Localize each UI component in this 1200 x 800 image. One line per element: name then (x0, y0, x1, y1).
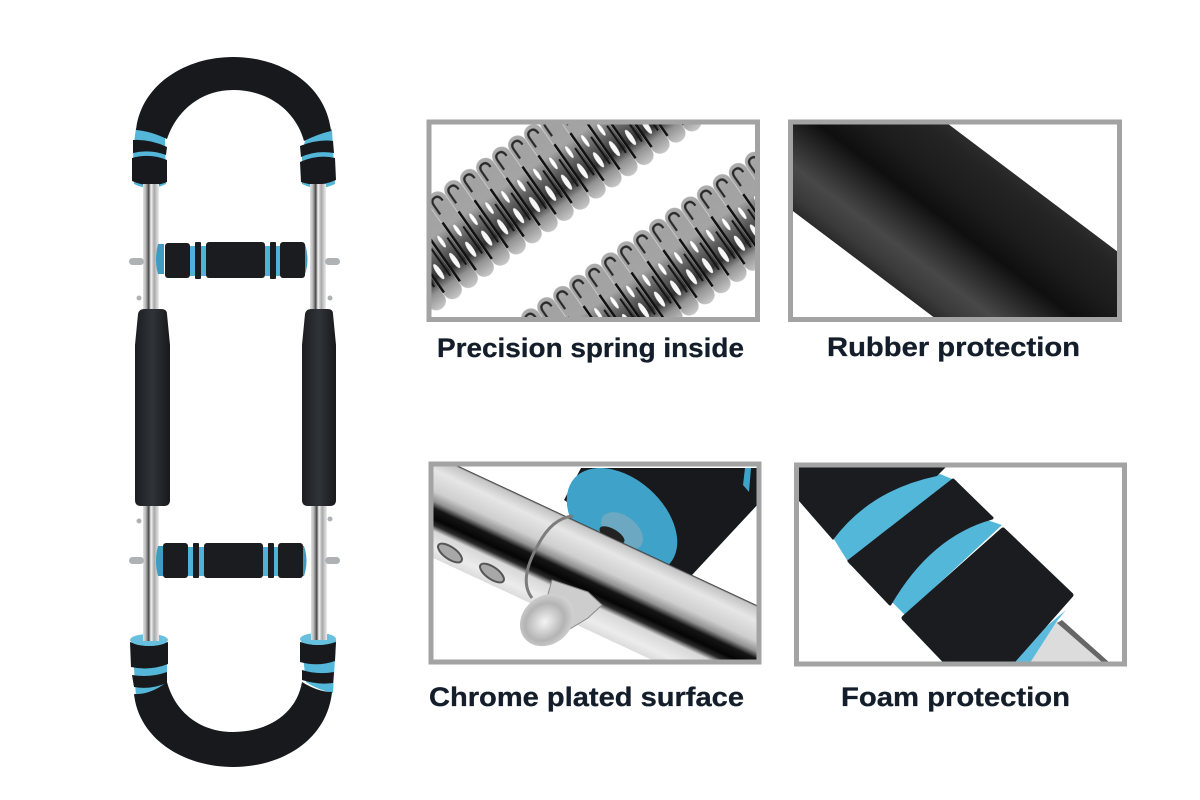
panel: chrome plated surface (428, 462, 762, 664)
rubber sleeves (135, 309, 336, 506)
bottom foam arch and grips (130, 625, 336, 767)
lower bolts (129, 516, 340, 564)
ring (526, 516, 573, 598)
frame (429, 122, 758, 320)
caption: foam protection: Foam protection (841, 682, 1070, 712)
panel: rubber protection (788, 120, 1122, 322)
mounting holes (437, 542, 505, 584)
panel: precision spring (426, 120, 760, 322)
blue bands (832, 474, 957, 565)
foam grip (564, 468, 756, 575)
photo: foam grip (797, 466, 1124, 664)
chrome tubes (143, 184, 327, 641)
lower crossbar grip (156, 543, 306, 578)
panel: foam protection (796, 465, 1124, 664)
frame (790, 122, 1120, 320)
product: arm exerciser (129, 57, 340, 767)
photo: springs (432, 124, 755, 317)
frame (796, 465, 1124, 664)
tube (434, 466, 756, 660)
cap nut (520, 579, 602, 646)
chrome shaft (1031, 621, 1101, 662)
caption: rubber protection: Rubber protection (827, 332, 1080, 362)
photo: chrome tube (434, 466, 756, 660)
caption: chrome plated surface: Chrome plated surface (429, 682, 744, 712)
frame (431, 464, 759, 662)
top foam arch and grips (132, 57, 336, 188)
upper bolts (129, 258, 340, 300)
black foam segments (797, 466, 947, 540)
upper crossbar grip (156, 242, 308, 279)
photo: rubber tube (793, 124, 1117, 317)
caption: precision spring: Precision spring inside (437, 333, 744, 363)
blue end cap (1016, 610, 1066, 662)
